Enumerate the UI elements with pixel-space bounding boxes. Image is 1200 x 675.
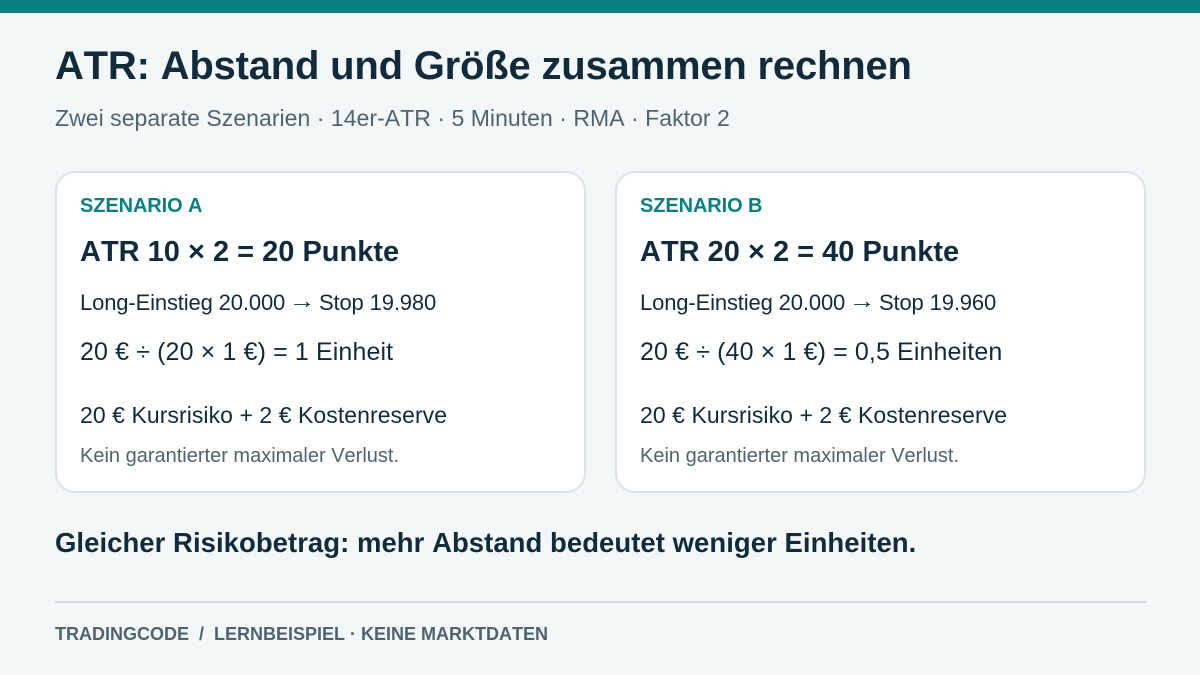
subtitle: Zwei separate Szenarien · 14er-ATR · 5 Minuten · RMA · Faktor 2 <box>55 105 730 131</box>
scenario B label: SZENARIO B <box>640 195 762 217</box>
scenario B entry and stop: → <box>849 288 875 313</box>
title: ATR: Abstand und Größe zusammen rechnen <box>55 44 912 88</box>
scenario A label: SZENARIO A <box>80 195 202 217</box>
scenario B risk: 20 € Kursrisiko + 2 € Kostenreserve <box>640 402 1007 428</box>
panel: Szenario B <box>615 171 1146 493</box>
scenario A position size: 20 € ÷ (20 × 1 €) = 1 Einheit <box>80 338 393 366</box>
scenario B position size: 20 € ÷ (40 × 1 €) = 0,5 Einheiten <box>640 338 1002 366</box>
scenario A ATR formula: ATR 10 × 2 = 20 Punkte <box>80 236 399 268</box>
scenario B entry and stop: Long-Einstieg 20.000 Stop 19.960 <box>640 290 996 315</box>
scenario A entry and stop: → <box>289 288 315 313</box>
scenario A note: Kein garantierter maximaler Verlust. <box>80 445 399 467</box>
scenario B ATR formula: ATR 20 × 2 = 40 Punkte <box>640 236 959 268</box>
panel: Szenario A <box>55 171 586 493</box>
scenario A entry and stop: Long-Einstieg 20.000 Stop 19.980 <box>80 290 436 315</box>
scenario A risk: 20 € Kursrisiko + 2 € Kostenreserve <box>80 402 447 428</box>
footer: TRADINGCODE / LERNBEISPIEL · KEINE MARKTDATEN <box>55 624 548 644</box>
scenario B note: Kein garantierter maximaler Verlust. <box>640 445 959 467</box>
takeaway: Gleicher Risikobetrag: mehr Abstand bedeutet weniger Einheiten. <box>55 527 916 558</box>
top accent bar <box>0 0 1200 13</box>
